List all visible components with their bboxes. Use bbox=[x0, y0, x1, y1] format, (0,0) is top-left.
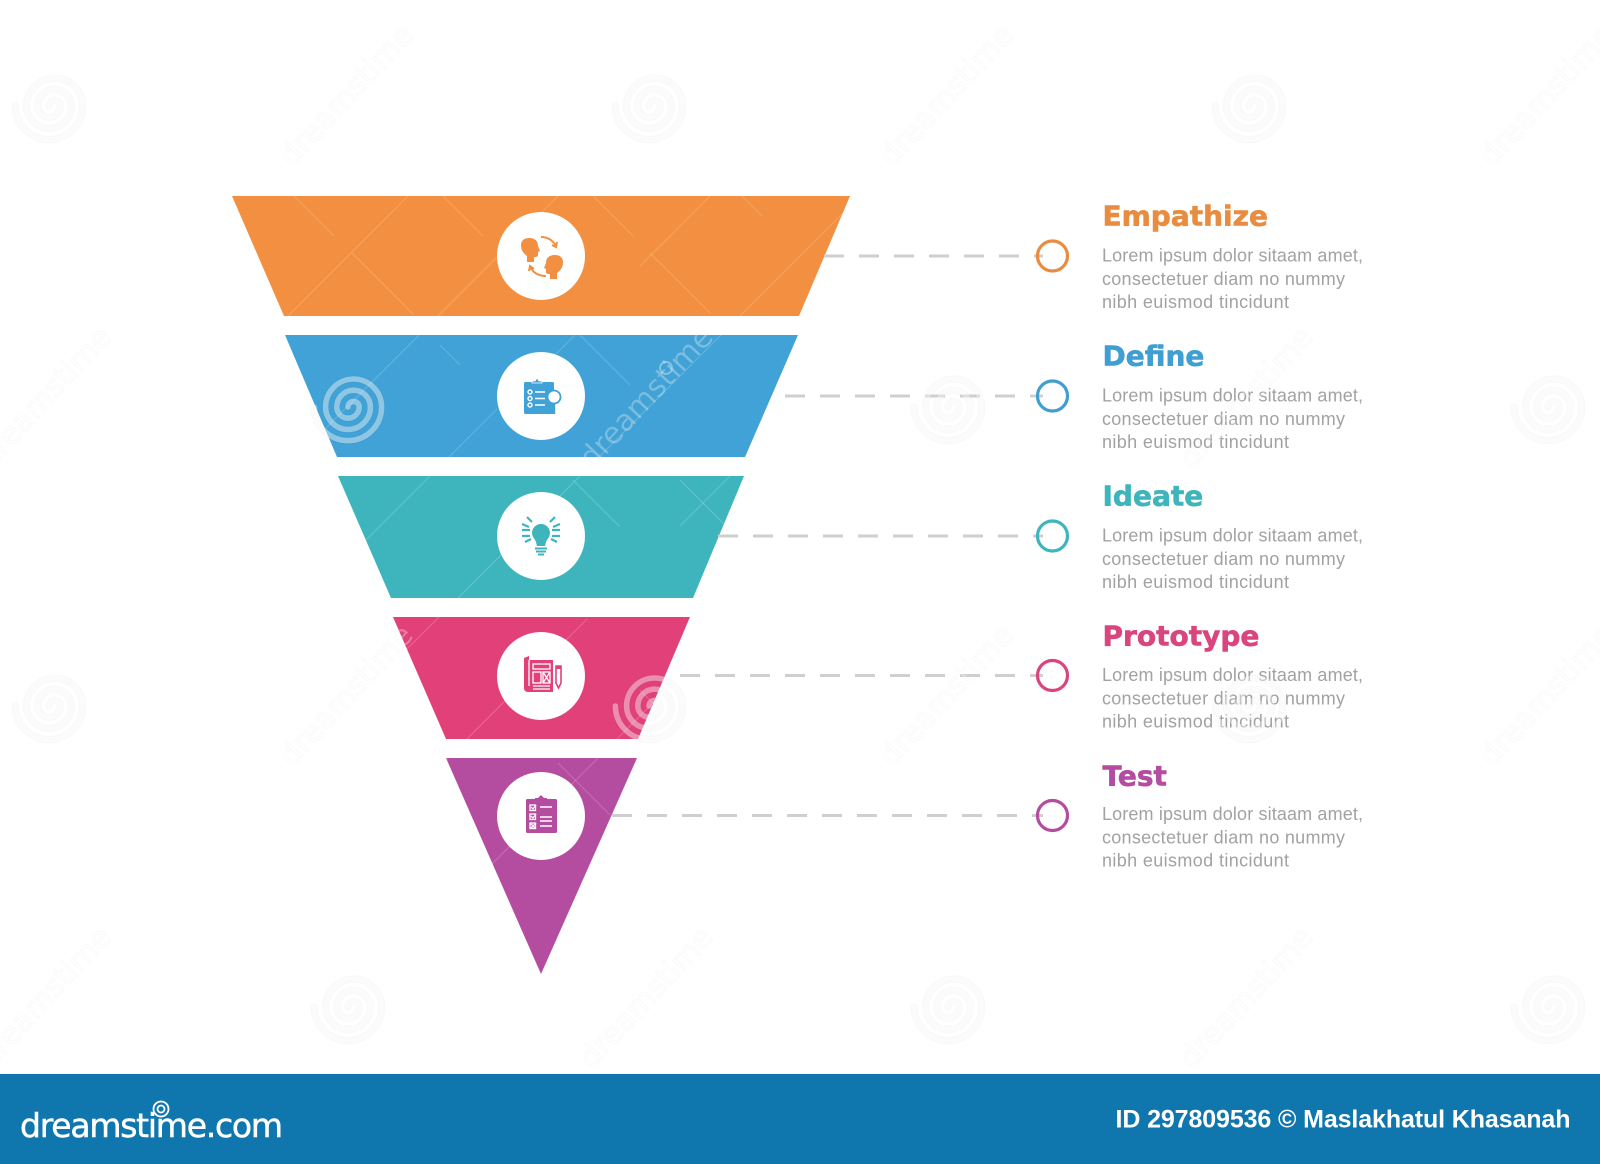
icon badge: two heads exchanging bbox=[497, 212, 585, 300]
watermark layer: dreamstime bbox=[572, 320, 721, 475]
text block: Test: nibh euismod tincidunt bbox=[1102, 850, 1289, 870]
funnel band: Ideate bbox=[338, 476, 744, 598]
text block: Test: Test bbox=[1102, 760, 1167, 793]
connector: Prototype bbox=[680, 674, 1043, 677]
connector: Define bbox=[785, 394, 1043, 398]
text block: Ideate: consectetuer diam no nummy bbox=[1102, 549, 1345, 569]
text block: Test bbox=[1102, 760, 1363, 870]
icon badge: light bulb bbox=[497, 492, 585, 580]
icon badge: checklist clipboard bbox=[497, 772, 585, 860]
text block: Empathize: Lorem ipsum dolor sitaam amet, bbox=[1102, 246, 1363, 266]
text block: Empathize: consectetuer diam no nummy bbox=[1102, 269, 1345, 289]
text block: Ideate: nibh euismod tincidunt bbox=[1102, 572, 1289, 592]
marker: Empathize bbox=[1038, 241, 1068, 271]
connector: Ideate bbox=[718, 534, 1043, 538]
watermark layer: dreamstime bbox=[1172, 920, 1321, 1075]
funnel band: Empathize bbox=[232, 196, 850, 316]
watermark layer: dreamstime bbox=[872, 18, 1021, 173]
footer credit: ID 297809536 © Maslakhatul Khasanah bbox=[1116, 1106, 1570, 1134]
text block: Define: Define bbox=[1102, 340, 1204, 373]
text block: Ideate bbox=[1102, 480, 1363, 592]
text block: Empathize: Empathize bbox=[1102, 200, 1268, 233]
connector: Empathize bbox=[824, 254, 1043, 258]
watermark layer: dreamstime bbox=[272, 18, 421, 173]
footer logo text: dreamstime.com bbox=[20, 1106, 283, 1145]
funnel band: Prototype bbox=[393, 617, 690, 739]
funnel band: Test bbox=[446, 758, 637, 974]
footer logo spiral bbox=[154, 1102, 168, 1116]
marker: Prototype bbox=[1038, 660, 1068, 690]
watermark layer: dreamstime bbox=[272, 618, 421, 773]
text block: Define: consectetuer diam no nummy bbox=[1102, 409, 1345, 429]
text block: Prototype: Lorem ipsum dolor sitaam amet, bbox=[1102, 665, 1363, 685]
watermark layer: dreamstime bbox=[872, 618, 1021, 773]
text block: Define: nibh euismod tincidunt bbox=[1102, 432, 1289, 452]
text block: Prototype: nibh euismod tincidunt bbox=[1102, 712, 1289, 732]
watermark layer: dreamstime bbox=[1172, 320, 1321, 475]
text block: Empathize: nibh euismod tincidunt bbox=[1102, 292, 1289, 312]
watermark layer: dreamstime bbox=[572, 920, 721, 1075]
marker: Test bbox=[1038, 800, 1068, 830]
text block: Prototype: consectetuer diam no nummy bbox=[1102, 688, 1345, 708]
text block: Define bbox=[1102, 340, 1363, 452]
text block: Test: Lorem ipsum dolor sitaam amet, bbox=[1102, 804, 1363, 824]
funnel band: Define bbox=[285, 335, 798, 457]
text block: Prototype bbox=[1102, 620, 1363, 732]
text block: Test: consectetuer diam no nummy bbox=[1102, 827, 1345, 847]
marker: Define bbox=[1038, 381, 1068, 411]
text block: Empathize bbox=[1102, 200, 1363, 312]
marker: Ideate bbox=[1038, 521, 1068, 551]
icon badge: clipboard with magnifier bbox=[497, 352, 585, 440]
text block: Ideate: Ideate bbox=[1102, 480, 1203, 513]
connector: Test bbox=[612, 814, 1043, 817]
icon badge: blueprint and pencil bbox=[497, 632, 585, 720]
text block: Prototype: Prototype bbox=[1102, 620, 1259, 653]
footer bar bbox=[0, 1074, 1600, 1164]
text block: Define: Lorem ipsum dolor sitaam amet, bbox=[1102, 386, 1363, 406]
funnel chart bbox=[232, 196, 850, 974]
text block: Ideate: Lorem ipsum dolor sitaam amet, bbox=[1102, 526, 1363, 546]
